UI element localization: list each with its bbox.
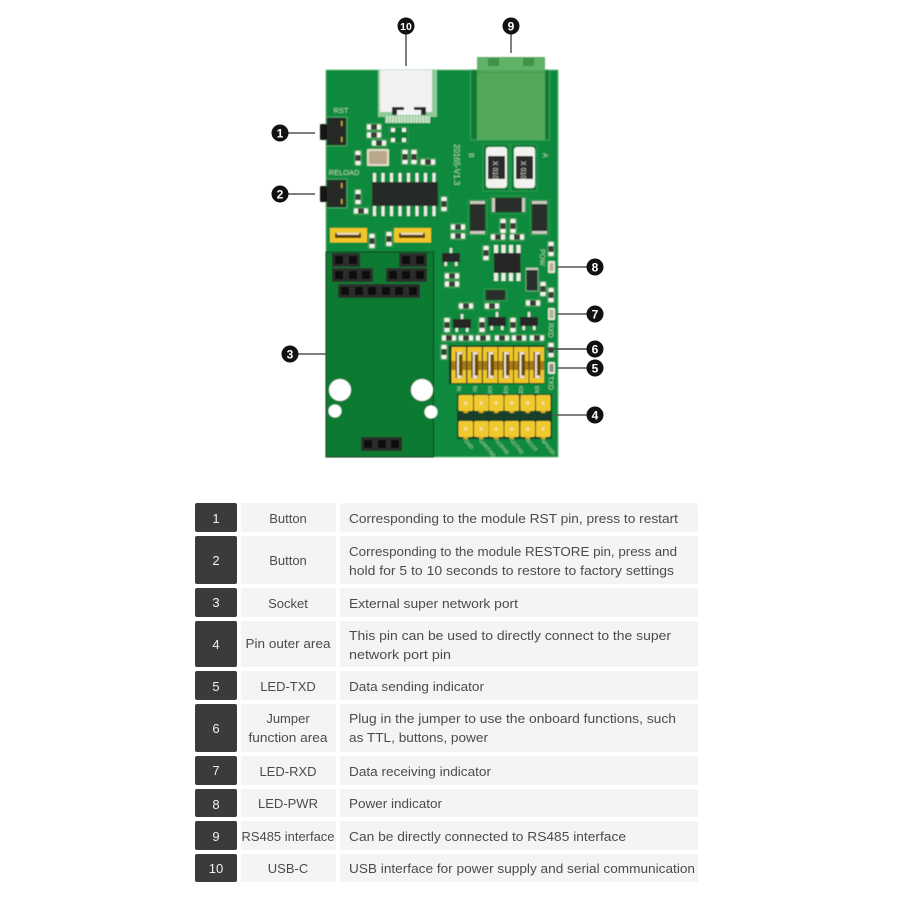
SOIC-8 chip	[494, 245, 520, 281]
jumper silk labels: IO1	[502, 386, 508, 394]
row 1: Button	[269, 511, 307, 526]
pin silk labels: UART/SD	[477, 438, 496, 459]
top jumpers	[330, 228, 431, 242]
callout 4: 4	[592, 408, 599, 422]
pin silk labels: UORXD	[493, 438, 510, 456]
LED silk labels	[538, 249, 554, 390]
callout 8	[556, 258, 604, 276]
callout 3: 3	[287, 348, 294, 362]
row 3: 3	[212, 595, 220, 610]
fuses: X 010	[491, 161, 498, 179]
row 3: External super network port	[349, 596, 518, 611]
USB-C connector	[378, 70, 437, 123]
pin silk labels: UOTXD	[508, 438, 525, 456]
pin header outer area	[457, 394, 552, 439]
PCB board diagram	[320, 57, 558, 459]
row 10: 10	[209, 861, 223, 876]
small resistors and capacitors	[353, 123, 555, 360]
callout 5	[557, 360, 604, 376]
row 9: 9	[212, 829, 220, 844]
row 2: hold for 5 to 10 seconds to restore to factory settings	[349, 563, 675, 578]
silk labels A and B	[467, 153, 548, 158]
pin silk labels: SPIUSD	[539, 438, 556, 457]
board version label: 20165-V1.3	[452, 144, 461, 186]
row 5	[195, 671, 698, 700]
callout 2: 2	[277, 188, 284, 202]
row 1	[195, 503, 698, 532]
LED indicators	[548, 261, 555, 374]
row 4	[195, 621, 698, 667]
row 2: 2	[212, 553, 220, 568]
row 1: Corresponding to the module RST pin, press to restart	[349, 511, 678, 526]
callout 9	[502, 18, 520, 53]
callout 3	[282, 346, 326, 362]
LED silk labels: TXD	[546, 376, 554, 390]
horizontal SOT	[484, 289, 507, 301]
row 9: Can be directly connected to RS485 interface	[349, 829, 626, 844]
row 8: LED-PWR	[258, 796, 318, 811]
callout 1: 1	[277, 126, 284, 140]
callout 1	[272, 124, 315, 142]
row 2: Button	[269, 553, 307, 568]
row 1: 1	[212, 511, 220, 526]
RELOAD button	[320, 168, 360, 208]
legend table	[195, 503, 698, 882]
jumper silk labels: IO0	[486, 386, 492, 394]
row 7: LED-RXD	[259, 764, 317, 779]
jumper silk labels: IN	[455, 386, 461, 391]
callout 7: 7	[592, 308, 599, 322]
callout 10: 10	[400, 21, 412, 33]
row 7	[195, 756, 698, 785]
row 2	[195, 536, 698, 584]
row 9: RS485 interface	[242, 829, 334, 844]
row 4: 4	[212, 637, 220, 652]
LED silk labels: POW	[538, 249, 545, 266]
board base	[326, 70, 558, 457]
silk labels A and B: B	[467, 153, 474, 158]
fuses: X 010	[519, 161, 526, 179]
row 7: 7	[212, 763, 220, 778]
row 6: Jumper	[266, 711, 310, 726]
row 9	[195, 821, 698, 850]
SOT transistors	[442, 248, 538, 332]
jumper silk labels: EN	[533, 386, 539, 393]
callout 5: 5	[592, 362, 599, 376]
row 5: Data sending indicator	[349, 679, 485, 694]
row 6: Plug in the jumper to use the onboard functions, such	[349, 711, 676, 726]
vertical diode near POW	[526, 268, 538, 291]
jumper silk labels: IO2	[517, 386, 523, 394]
row 6: function area	[248, 730, 328, 745]
row 10: USB-C	[268, 861, 308, 876]
row 6	[195, 704, 698, 752]
row 4: This pin can be used to directly connect to the super	[349, 628, 672, 643]
callout 4	[552, 406, 604, 424]
socket: bottom row	[361, 437, 402, 451]
callout 9: 9	[508, 20, 515, 34]
small pad group	[389, 127, 408, 143]
jumper silk labels	[455, 386, 539, 394]
RST button	[320, 106, 349, 146]
jumper function block	[449, 346, 544, 384]
row 4: Pin outer area	[246, 636, 331, 651]
row 6: as TTL, buttons, power	[349, 730, 489, 745]
row 8	[195, 789, 698, 817]
diodes	[468, 196, 549, 235]
socket module	[326, 252, 438, 457]
row 3: Socket	[268, 596, 308, 611]
silk labels A and B: A	[541, 153, 548, 158]
row 5: 5	[212, 679, 220, 694]
callout 8: 8	[592, 260, 599, 274]
callout 7	[556, 306, 604, 322]
row 8: 8	[212, 797, 220, 812]
row 3	[195, 588, 698, 617]
pin silk labels	[462, 438, 556, 459]
callout 6	[547, 340, 604, 358]
mounting holes	[328, 379, 438, 418]
pin silk labels: BOOT	[524, 438, 538, 453]
main SOIC chip	[372, 173, 438, 216]
crystal	[367, 149, 389, 166]
row 7: Data receiving indicator	[349, 764, 492, 779]
callout 6: 6	[592, 342, 599, 356]
row 10: USB interface for power supply and serial communication	[349, 861, 695, 876]
row 6: 6	[212, 721, 220, 736]
RST button: RST	[334, 106, 349, 115]
callout 10	[398, 18, 414, 66]
socket: upper rows	[332, 253, 427, 298]
RELOAD button: RELOAD	[329, 168, 360, 177]
row 5: LED-TXD	[260, 679, 316, 694]
row 2: Corresponding to the module RESTORE pin, press and	[349, 544, 677, 559]
callout 2	[272, 186, 315, 202]
row 4: network port pin	[349, 647, 451, 662]
jumper silk labels: 5V	[471, 386, 477, 393]
RS485 terminal block	[470, 57, 550, 140]
row 8: Power indicator	[349, 796, 443, 811]
pin silk labels: GND	[462, 438, 474, 451]
row 10	[195, 854, 698, 882]
fuses	[483, 144, 537, 191]
LED silk labels: RXD	[546, 323, 554, 338]
